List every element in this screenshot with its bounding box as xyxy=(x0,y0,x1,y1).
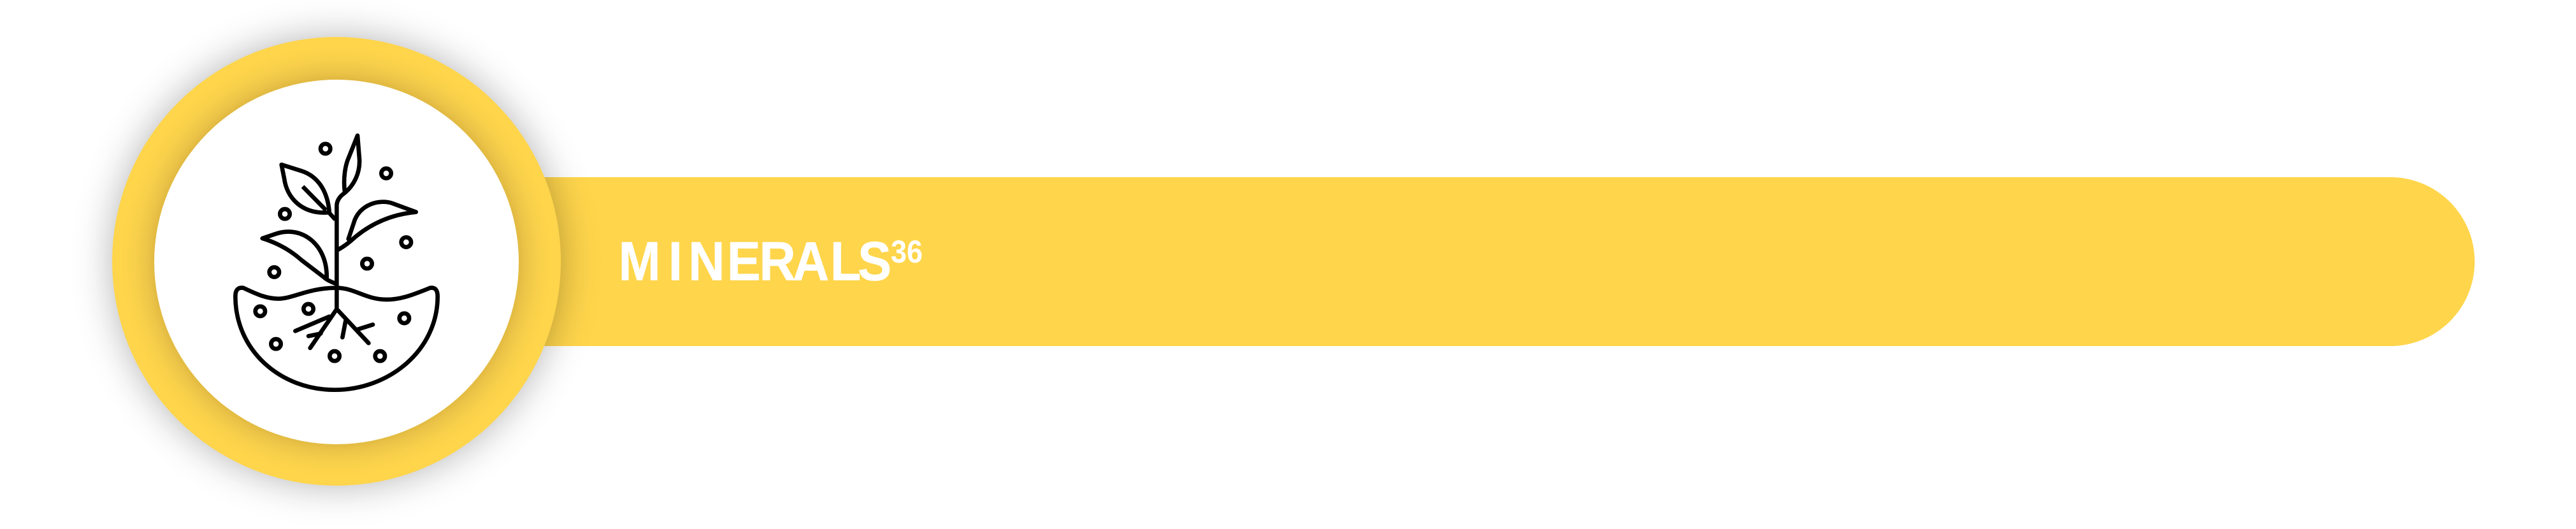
soft shadow behind ring xyxy=(69,0,604,529)
banner bar xyxy=(446,177,2475,346)
mineral dots in soil xyxy=(256,304,409,361)
plant stem and leaves xyxy=(263,136,416,308)
mineral dots above ground xyxy=(270,144,411,277)
heading: MINERALS with citation: MINERALS xyxy=(619,230,892,292)
icon: plant growing in mineral-rich soil xyxy=(235,136,438,390)
outer yellow ring xyxy=(112,37,561,486)
superscript citation: 36 xyxy=(891,235,923,270)
soil with roots xyxy=(235,287,438,390)
inner white disc xyxy=(154,80,519,444)
